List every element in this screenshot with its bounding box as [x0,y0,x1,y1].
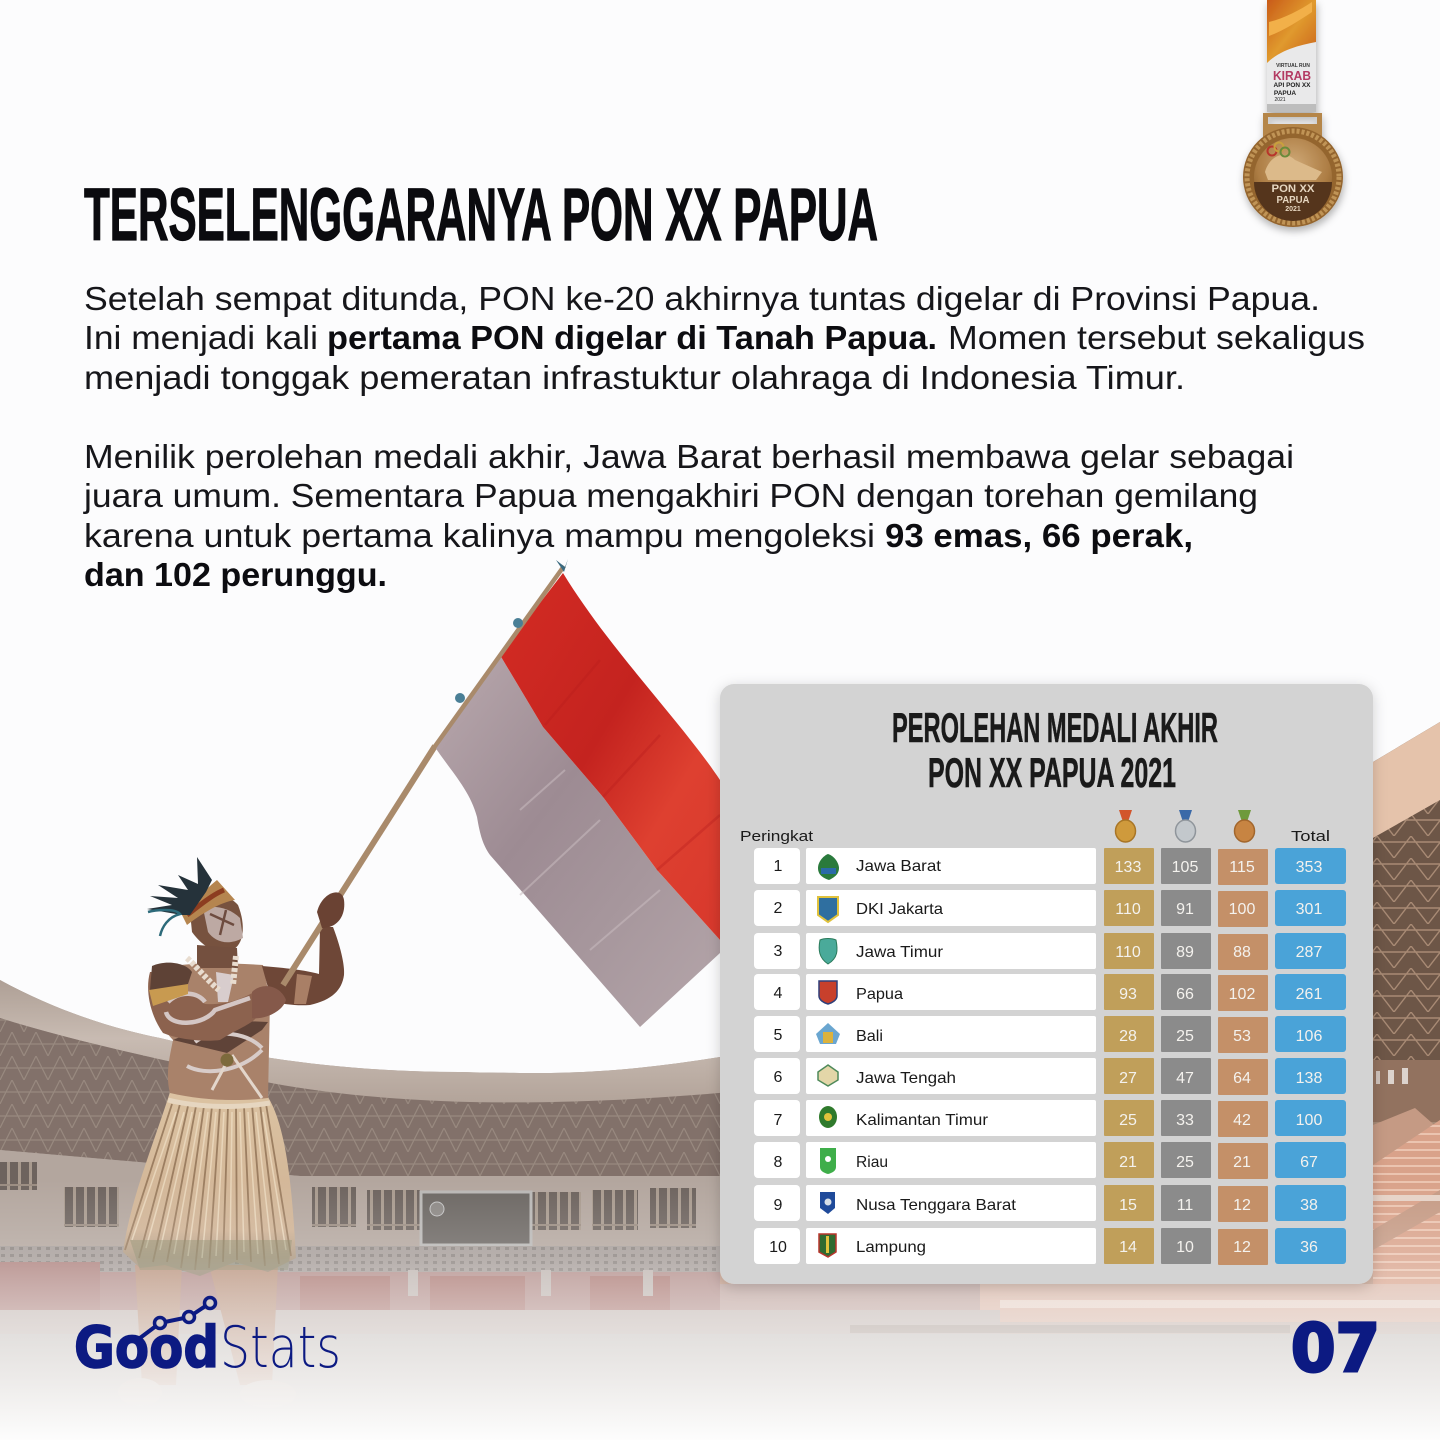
row 2: DKI Jakarta: 110 [1115,901,1141,918]
head [182,880,243,968]
row 3: Jawa Timur: 110 [1115,944,1141,961]
stadium background photo [0,720,1440,1440]
row 6: Jawa Tengah: 138 [1296,1070,1322,1087]
paragraph 1 [84,280,1365,396]
paragraph 1: menjadi tonggak pemeratan infrastuktur olahraga di Indonesia Timur. [84,359,1185,396]
torso [149,963,270,1100]
row 2: DKI Jakarta: 100 [1229,901,1255,918]
body paint [173,972,268,1098]
table heading: PON XX PAPUA 2021 [928,749,1176,796]
paragraph 1: pertama PON digelar di Tanah Papua. [327,319,937,356]
icon: silver medal [1176,810,1196,842]
paragraph 1: Setelah sempat ditunda, PON ke-20 akhirnya tuntas digelar di Provinsi Papua. [84,280,1320,317]
row 2: DKI Jakarta: 91 [1176,901,1194,918]
row 7: Kalimantan Timur: 25 [1119,1112,1137,1129]
stadium roof band [0,975,730,1102]
row 1: Jawa Barat: 353 [1296,859,1322,876]
roof truss structure [0,1018,730,1176]
row 4: Papua: 261 [1296,986,1322,1003]
paragraph 1: Momen tersebut sekaligus [948,319,1365,356]
man in traditional Papuan dress [118,746,435,1408]
row 4: Papua: 66 [1176,986,1194,1003]
row 8: Riau: 21 [1119,1154,1137,1171]
flag pole tip [556,559,568,572]
row 10: Lampung: 10 [1176,1239,1194,1256]
hands [252,892,344,1018]
legs and feet [118,1265,296,1408]
row 7: Kalimantan Timur: 42 [1233,1112,1251,1129]
feathers [147,857,212,936]
arm bands [294,974,312,1004]
row 1: Jawa Barat: 115 [1229,859,1255,876]
medal at top right [1243,0,1343,227]
row 9: Nusa Tenggara Barat: Nusa Tenggara Barat [856,1197,1017,1214]
paragraph 2: dan 102 perunggu. [84,556,387,593]
flag: red stripe [500,573,720,940]
row 10: Lampung: 12 [1233,1239,1251,1256]
column header: rank: Peringkat [740,828,814,845]
row 2: DKI Jakarta [754,890,1346,927]
logo: chart line icon [140,1298,216,1338]
row 9: Nusa Tenggara Barat: 9 [774,1197,783,1214]
ribbon: VIRTUAL RUN [1276,63,1310,69]
row 9: Nusa Tenggara Barat [754,1185,1346,1222]
row 5: Bali: 106 [1296,1028,1322,1045]
row 10: Lampung: 36 [1300,1239,1318,1256]
row 5: Bali: 5 [774,1027,783,1044]
row 7: Kalimantan Timur: 33 [1176,1112,1194,1129]
Indonesian flag [433,559,720,1027]
row 4: Papua: Papua [856,986,903,1003]
row 5: Bali: Bali [856,1028,883,1045]
ribbon: PAPUA [1274,90,1296,97]
row 8: Riau: 67 [1300,1154,1318,1171]
row 7: Kalimantan Timur: 7 [774,1112,783,1129]
row 6: Jawa Tengah: 27 [1119,1070,1137,1087]
spectator stands [0,1246,720,1271]
row 10: Lampung: Lampung [856,1239,926,1256]
row 9: Nusa Tenggara Barat: 11 [1177,1197,1193,1214]
row 3: Jawa Timur: 89 [1176,944,1194,961]
page number: 07 [1291,1310,1380,1387]
row 4: Papua: 4 [774,985,783,1002]
red seating [0,1262,730,1312]
row 7: Kalimantan Timur: Kalimantan Timur [856,1112,989,1129]
paragraph 2: Menilik perolehan medali akhir, Jawa Barat berhasil membawa gelar sebagai [84,438,1294,475]
paragraph 2: juara umum. Sementara Papua mengakhiri PON dengan torehan gemilang [83,477,1258,514]
row 3: Jawa Timur: 287 [1296,944,1322,961]
row 5: Bali: 53 [1233,1028,1251,1045]
row 1: Jawa Barat: 133 [1115,859,1141,876]
row 8: Riau: 21 [1233,1154,1251,1171]
flag clip lower [455,693,465,703]
row 4: Papua: 102 [1229,986,1255,1003]
row 9: Nusa Tenggara Barat: 15 [1119,1197,1137,1214]
panel: medal table [720,684,1373,1284]
row 9: Nusa Tenggara Barat: 38 [1300,1197,1318,1214]
ribbon: KIRAB [1273,68,1311,83]
row 5: Bali [754,1016,1346,1053]
row 2: DKI Jakarta: 301 [1296,901,1322,918]
scoreboard [421,1192,531,1245]
title: TERSELENGGARANYA PON XX PAPUA [84,173,878,256]
row 3: Jawa Timur: 3 [774,943,783,960]
row 9: Nusa Tenggara Barat: 12 [1233,1197,1251,1214]
pitch barrier [0,1310,730,1334]
medal disc: PON XX [1272,183,1315,195]
icon: gold medal [1116,810,1136,842]
paragraph 2: 93 emas, 66 perak, [885,517,1193,554]
ribbon: API PON XX [1274,82,1311,89]
row 8: Riau: Riau [856,1154,888,1171]
row 2: DKI Jakarta: DKI Jakarta [856,901,943,918]
row 8: Riau: 25 [1176,1154,1194,1171]
row 8: Riau [754,1142,1346,1179]
paragraph 2 [83,438,1294,593]
row 7: Kalimantan Timur [754,1100,1346,1137]
icon: bronze medal [1234,810,1254,842]
paragraph 1: Ini menjadi kali [84,319,318,356]
grass skirt [123,1092,296,1276]
row 10: Lampung: 10 [769,1239,787,1256]
row 8: Riau: 8 [774,1154,783,1171]
fade overlay at bottom [0,1180,1440,1440]
row 6: Jawa Tengah: Jawa Tengah [856,1070,956,1087]
medal disc: 2021 [1285,206,1301,213]
column header: total: Total [1291,828,1330,845]
flag pole [283,746,435,985]
logo wordmark: Good [74,1315,219,1381]
row 1: Jawa Barat: 105 [1172,859,1198,876]
medal disc: PAPUA [1276,195,1310,206]
row 4: Papua: 93 [1119,986,1137,1003]
row 6: Jawa Tengah: 6 [774,1069,783,1086]
row 7: Kalimantan Timur: 100 [1296,1112,1322,1129]
shell necklace [187,956,236,990]
paragraph 2: karena untuk pertama kalinya mampu mengoleksi [84,517,875,554]
row 3: Jawa Timur: 88 [1233,944,1251,961]
row 5: Bali: 25 [1176,1028,1194,1045]
row 10: Lampung [754,1228,1346,1265]
medal clasp [1263,113,1322,137]
row 1: Jawa Barat [754,848,1346,885]
row 6: Jawa Tengah: 47 [1176,1070,1194,1087]
row 4: Papua [754,974,1346,1011]
row 6: Jawa Tengah: 64 [1233,1070,1251,1087]
concourse wall with windows [0,1150,730,1248]
medal disc [1243,127,1343,227]
ribbon: 2021 [1274,97,1286,103]
arm on left holding pole [148,963,256,1041]
row 3: Jawa Timur: Jawa Timur [856,944,944,961]
row 2: DKI Jakarta: 2 [774,900,783,917]
GoodStats logo: Stats [220,1315,341,1381]
right stand of stadium [720,722,1440,1365]
row 5: Bali: 28 [1119,1028,1137,1045]
row 6: Jawa Tengah [754,1058,1346,1095]
ribbon [1267,0,1316,112]
flag clips [513,618,523,628]
row 1: Jawa Barat: 1 [774,858,783,875]
row 3: Jawa Timur [754,933,1346,970]
flag pole along hoist [433,566,564,749]
row 10: Lampung: 14 [1119,1239,1137,1256]
flag: white stripe [435,655,720,1027]
GoodStats logo [74,1298,341,1381]
row 1: Jawa Barat: Jawa Barat [856,858,942,875]
arm on right raised [262,927,344,1005]
table heading [892,704,1218,796]
